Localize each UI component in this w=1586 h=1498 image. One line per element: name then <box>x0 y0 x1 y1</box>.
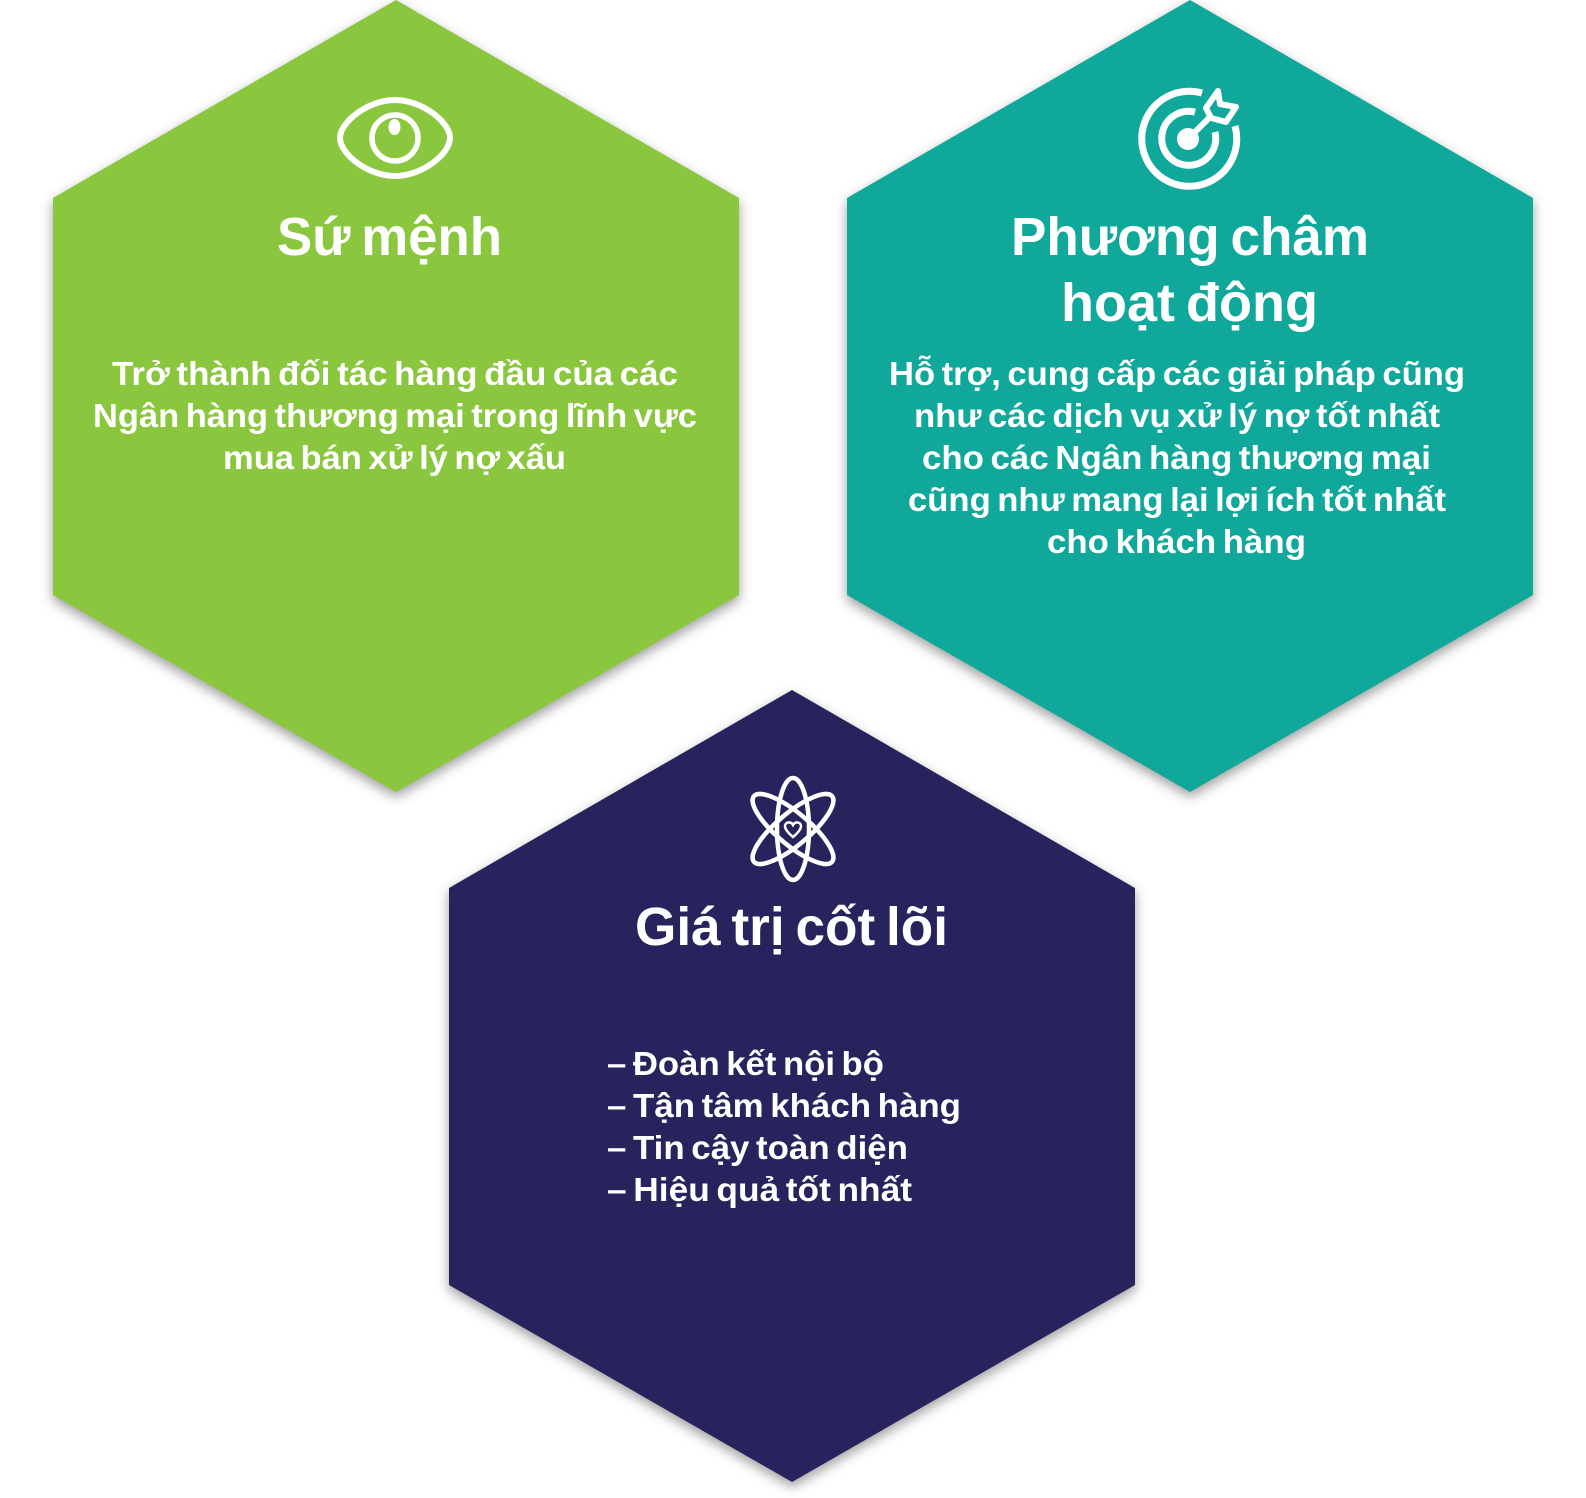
icon: target with arrow <box>1142 91 1237 186</box>
heading: Sứ mệnh: Sứ mệnh <box>277 207 502 267</box>
heading: Phương châm hoạt động: hoạt động <box>1061 273 1318 333</box>
navy hexagon <box>449 690 1135 1482</box>
panel: Sứ mệnh <box>53 0 739 792</box>
heading: Phương châm hoạt động <box>1011 207 1369 333</box>
list of core values: – Đoàn kết nội bộ <box>607 1046 884 1083</box>
body text: Hỗ trợ, cung cấp các giải pháp cũng <box>889 355 1465 393</box>
body text: Trở thành đối tác hàng đầu của các <box>112 356 678 393</box>
heading: Giá trị cốt lõi: Giá trị cốt lõi <box>635 897 948 957</box>
icon: eye <box>340 100 450 176</box>
icon: atom with heart <box>744 778 842 880</box>
body text: cũng như mang lại lợi ích tốt nhất <box>908 482 1446 519</box>
panel: Phương châm hoạt động <box>847 0 1533 792</box>
body text: cho khách hàng <box>1047 524 1306 561</box>
body text: như các dịch vụ xử lý nợ tốt nhất <box>914 398 1440 435</box>
list of core values: – Hiệu quả tốt nhất <box>607 1172 912 1209</box>
body text: Ngân hàng thương mại trong lĩnh vực <box>93 398 697 435</box>
green hexagon <box>53 0 739 792</box>
list of core values <box>607 1046 961 1209</box>
body text <box>889 355 1465 561</box>
teal hexagon <box>847 0 1533 792</box>
heading: Phương châm hoạt động: Phương châm <box>1011 207 1369 267</box>
body text <box>93 356 697 477</box>
body text: mua bán xử lý nợ xấu <box>223 440 566 477</box>
list of core values: – Tin cậy toàn diện <box>607 1130 908 1167</box>
list of core values: – Tận tâm khách hàng <box>607 1088 961 1125</box>
panel: Giá trị cốt lõi <box>449 690 1135 1482</box>
body text: cho các Ngân hàng thương mại <box>922 440 1431 477</box>
